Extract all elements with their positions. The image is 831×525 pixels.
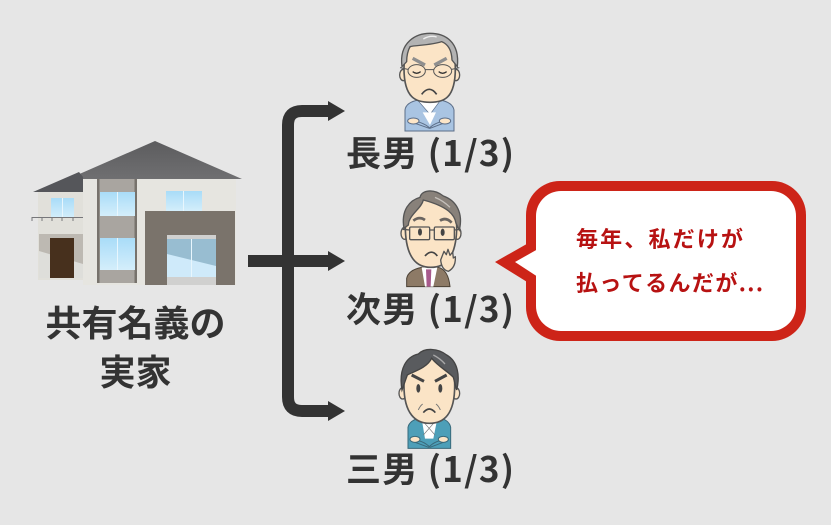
icon: second son bbox=[401, 191, 461, 287]
icon: third son bbox=[399, 349, 460, 448]
callout: speech bubble bbox=[495, 181, 806, 341]
label: third son 1/3: 三男 (1/3) bbox=[346, 442, 514, 493]
heading: shared-ownership family home: 共有名義の bbox=[45, 295, 226, 347]
arrow: branching bracket bbox=[248, 101, 345, 421]
label: eldest son 1/3: 長男 (1/3) bbox=[346, 126, 514, 177]
heading: second line: 実家 bbox=[99, 344, 172, 396]
callout text: first line: 毎年、私だけが bbox=[576, 222, 743, 254]
icon: eldest son bbox=[400, 33, 460, 131]
label: second son 1/3: 次男 (1/3) bbox=[346, 282, 514, 333]
callout text: second line: 払ってるんだが... bbox=[576, 266, 763, 298]
icon: house bbox=[32, 141, 242, 285]
